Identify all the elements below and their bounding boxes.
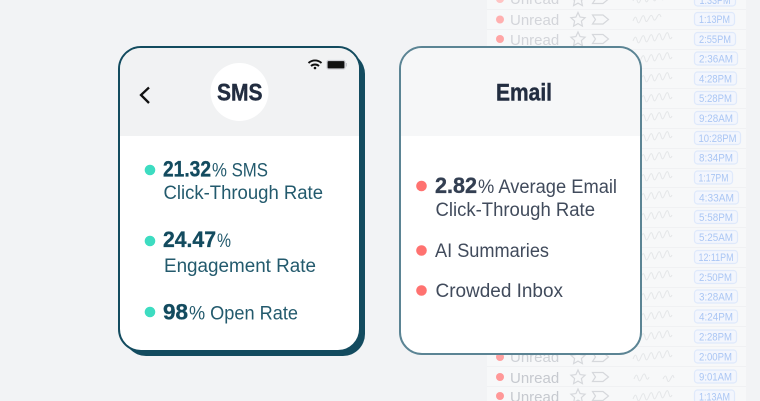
inbox row 15: 2:50PM bbox=[699, 272, 732, 284]
heading: SMS: SMS bbox=[217, 80, 262, 106]
inbox row 10: 1:17PM bbox=[698, 172, 728, 184]
list item: open rate bbox=[145, 300, 298, 324]
SMS card header band bbox=[120, 48, 359, 136]
inbox row 20: Unread bbox=[510, 370, 559, 387]
inbox row 2: Unread bbox=[510, 12, 559, 29]
list item: open rate: 98 bbox=[163, 300, 188, 324]
inbox row 6 bbox=[633, 92, 736, 105]
inbox row 12 bbox=[633, 210, 738, 224]
inbox row 13 bbox=[633, 230, 738, 244]
inbox row 8 bbox=[633, 132, 740, 145]
list item: email click-through rate: 2.82 bbox=[435, 173, 477, 198]
list item: email click-through rate: Click-Through Rate bbox=[436, 200, 595, 221]
panel: Email card bbox=[400, 47, 641, 354]
inbox row 3 bbox=[496, 32, 736, 49]
inbox row 17: 4:24PM bbox=[699, 312, 733, 324]
icon: battery bbox=[327, 60, 347, 69]
inbox row 4: 2:36AM bbox=[699, 54, 733, 66]
list item: SMS click-through rate: Click-Through Rate bbox=[164, 183, 323, 204]
list item: SMS click-through rate: % SMS bbox=[212, 160, 268, 182]
inbox row 20 bbox=[496, 370, 736, 387]
inbox row 5 bbox=[633, 72, 736, 86]
inbox row 21 bbox=[496, 389, 734, 401]
inbox row 7 bbox=[633, 112, 738, 125]
icon: wifi bbox=[308, 60, 322, 69]
inbox row 19: Unread bbox=[510, 349, 559, 366]
list item: AI summaries: AI Summaries bbox=[435, 241, 549, 262]
list item: SMS click-through rate bbox=[145, 156, 323, 204]
inbox row 4 bbox=[633, 52, 738, 66]
inbox row 14: 12:11PM bbox=[698, 252, 734, 264]
list item: engagement rate: Engagement Rate bbox=[164, 256, 316, 277]
inbox row 7: 9:28AM bbox=[699, 113, 733, 125]
inbox row 1 bbox=[496, 0, 736, 8]
list item: engagement rate bbox=[145, 227, 316, 277]
inbox row 18: 2:28PM bbox=[699, 332, 732, 344]
inbox row 3: 2:55PM bbox=[699, 34, 731, 46]
heading: Email: Email bbox=[496, 80, 552, 106]
inbox row 16: 3:28AM bbox=[699, 292, 733, 304]
icon: SMS title circle bbox=[210, 63, 268, 121]
inbox row 12: 5:58PM bbox=[699, 212, 733, 224]
inbox row 2 bbox=[496, 12, 734, 29]
inbox row 3: Unread bbox=[510, 32, 559, 49]
inbox row 19: 2:00PM bbox=[699, 352, 732, 364]
inbox row 6: 5:28PM bbox=[699, 93, 732, 105]
inbox row 19 bbox=[496, 349, 736, 366]
panel: inbox background list bbox=[487, 0, 746, 401]
inbox row 16 bbox=[633, 290, 738, 304]
list item: SMS click-through rate: 21.32 bbox=[163, 156, 211, 182]
inbox row 14 bbox=[633, 250, 738, 264]
inbox row 11: 4:33AM bbox=[699, 192, 734, 204]
inbox row 11 bbox=[633, 191, 738, 204]
inbox row 17 bbox=[633, 310, 738, 324]
list item: engagement rate: 24.47 bbox=[163, 227, 216, 252]
list item: email click-through rate bbox=[416, 173, 617, 221]
inbox row 10 bbox=[633, 171, 732, 184]
list item: crowded inbox: Crowded Inbox bbox=[436, 281, 563, 302]
icon: back arrow bbox=[141, 88, 149, 103]
inbox row 20: 9:01AM bbox=[699, 372, 732, 384]
inbox row 13: 5:25AM bbox=[699, 232, 733, 244]
inbox row 9: 8:34PM bbox=[699, 152, 733, 164]
inbox row 18 bbox=[633, 330, 736, 344]
list item: email click-through rate: % Average Email bbox=[478, 177, 617, 198]
inbox row 8: 10:28PM bbox=[698, 133, 736, 145]
inbox row 9 bbox=[633, 151, 738, 164]
inbox row 5: 4:28PM bbox=[699, 74, 732, 86]
inbox row 15 bbox=[633, 270, 736, 284]
Email card header band bbox=[401, 48, 640, 136]
list item: open rate: % Open Rate bbox=[189, 304, 298, 324]
list item: engagement rate: % bbox=[217, 231, 231, 252]
panel: SMS phone card bbox=[119, 47, 365, 356]
inbox row 2: 1:13PM bbox=[699, 14, 730, 26]
